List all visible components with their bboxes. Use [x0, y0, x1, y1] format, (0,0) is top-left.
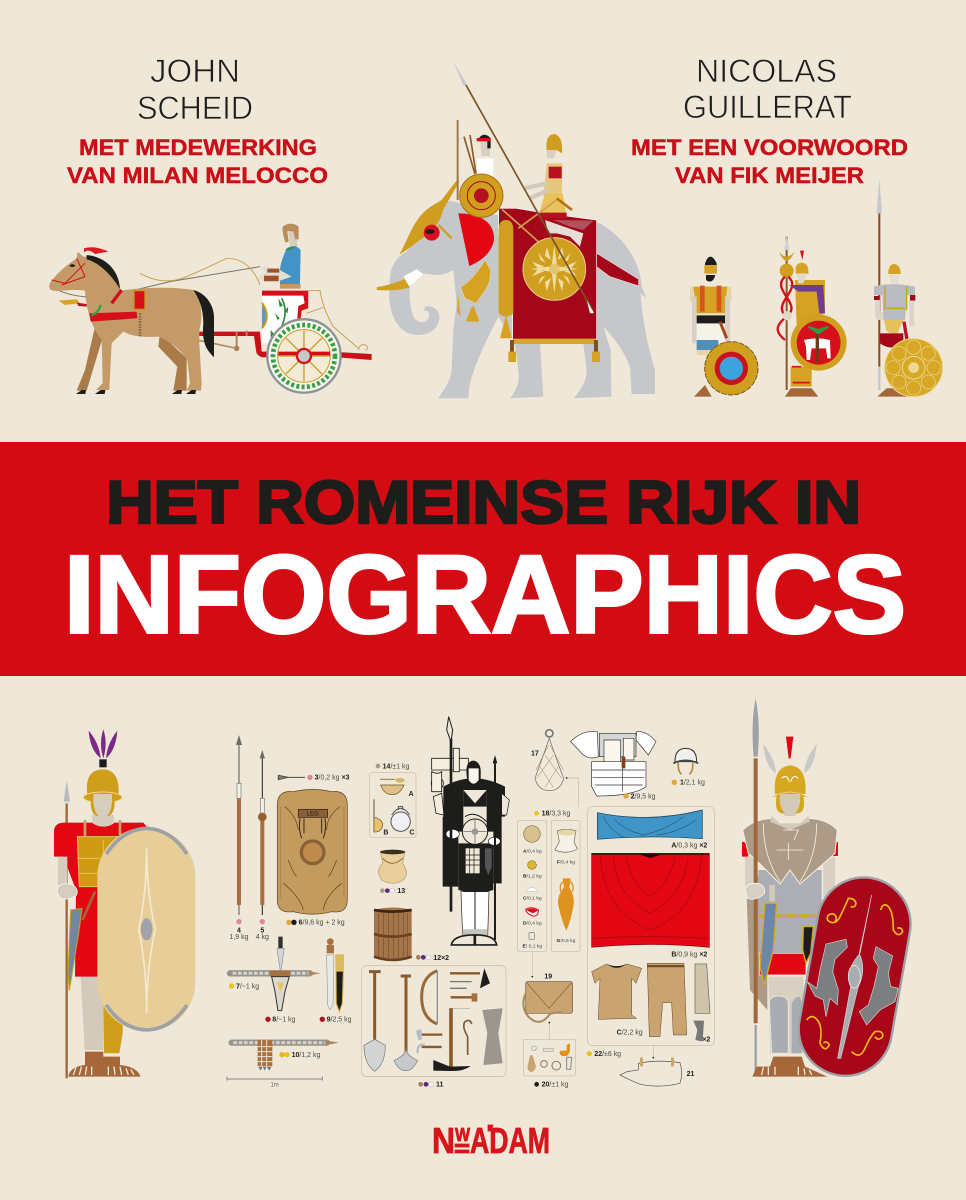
- illustration: three ancient soldiers: [690, 178, 943, 397]
- soldier three: Roman: [874, 178, 943, 397]
- item 8: dagger: [265, 937, 296, 1024]
- lower left legionary and weapons: [54, 729, 352, 1089]
- sun shield on elephant: [523, 238, 586, 300]
- neck: [770, 816, 810, 830]
- soldier feet: [451, 935, 497, 945]
- fur cape: [743, 818, 837, 884]
- item 2: lorica armour: 2/9,5 kg: [631, 793, 656, 800]
- right items: armour, helmet, clothing: [571, 731, 714, 1086]
- item 22 label: 22/±6 kg: [594, 1051, 621, 1058]
- legs: [81, 977, 103, 1050]
- chariot pole and floor: [195, 332, 372, 360]
- elephant headpiece: [399, 179, 459, 254]
- soldier legs: [461, 892, 489, 937]
- cloth A: blue: [597, 810, 707, 850]
- chariot wheel: [267, 319, 341, 393]
- illustration: war elephant: [377, 62, 655, 398]
- soldier one: Punic: [690, 257, 758, 397]
- item 18: food panels: G/0,5 kg: [557, 938, 576, 944]
- legionary oval shield: [97, 827, 195, 1031]
- item 11: tools panel: [362, 966, 506, 1089]
- item 18: food panels: A/0,4 kg: [523, 848, 542, 854]
- rider: general: [502, 134, 583, 247]
- yellow scrolls: [807, 898, 903, 1055]
- publisher logo: Nw'Adam: [432, 1120, 550, 1161]
- author left: John Scheid: VAN MILAN MELOCCO: [67, 163, 328, 188]
- item 7: belt: [229, 972, 321, 990]
- publisher logo: Nw'Adam: W: [455, 1125, 470, 1145]
- small tools: [422, 973, 480, 1047]
- arm and hand: [58, 857, 67, 885]
- publisher logo: Nw'Adam: ADAM: [470, 1120, 550, 1161]
- horse mane: [87, 255, 120, 289]
- item 4: pilum: 4: [237, 927, 241, 934]
- long spear: [465, 83, 593, 312]
- wolf shield: [791, 870, 918, 1083]
- item 2: lorica armour: [571, 731, 656, 800]
- horse harness: [84, 247, 108, 254]
- item 6: scutum: [277, 789, 347, 927]
- item 12: basket: [374, 907, 449, 962]
- author right: Nicolas Guillerat: GUILLERAT: [683, 89, 852, 125]
- horse far legs: [77, 327, 187, 391]
- red tunic: [54, 823, 147, 977]
- cloth A: blue: A/0,3 kg ×2: [671, 843, 707, 850]
- soldier skirt: [458, 843, 493, 892]
- lower right legionary: [742, 698, 918, 1083]
- spear: [753, 698, 759, 1075]
- item 14: mess kit panel: [369, 763, 416, 837]
- author left: John Scheid: SCHEID: [137, 90, 253, 126]
- soldier backpack: [431, 748, 468, 815]
- item 21: sack: 21: [687, 1071, 695, 1078]
- spear of legionary: [64, 780, 70, 1078]
- black and white soldier: [431, 717, 509, 945]
- center: equipped soldier, containers and tools: [362, 717, 580, 1089]
- publisher logo: Nw'Adam: N: [432, 1120, 455, 1161]
- rope: [482, 1008, 503, 1065]
- sandals: [68, 1052, 141, 1077]
- item 5: pilum with ball: [256, 750, 269, 941]
- pickaxe: [401, 976, 411, 1053]
- elephant blanket: [499, 208, 597, 339]
- elephant tusk: [377, 277, 410, 290]
- soldier spears: [447, 738, 455, 912]
- item 9: gladius: 9/2,5 kg: [327, 1017, 352, 1024]
- elephant neck trapper: [458, 213, 494, 266]
- hand: [745, 883, 765, 899]
- soldier hands: [446, 829, 459, 839]
- soldier two: with caduceus: [778, 235, 847, 397]
- item 18: food panels: 18/3,3 kg: [542, 811, 571, 818]
- item 17: net: [531, 730, 578, 807]
- title line two: INFOGRAPHICS: [64, 534, 906, 656]
- cloak back and legs: [746, 877, 803, 1053]
- item 8: dagger: 8/~1 kg: [272, 1017, 296, 1024]
- item 19: satchel: [523, 974, 573, 1039]
- item 11: tools panel: 11: [436, 1082, 443, 1089]
- wolves: [807, 939, 847, 1017]
- sword and belt: [759, 885, 817, 985]
- cloth B: red cloak: B/0,9 kg ×2: [671, 952, 707, 959]
- item 7: belt: 7/~1 kg: [236, 983, 259, 990]
- item 13: pot: [379, 850, 407, 895]
- item 12: basket: 12×2: [433, 955, 449, 962]
- helmet crest: [763, 737, 817, 773]
- clothing panel: [588, 807, 714, 1046]
- item 18: food panels: F/0,4 kg: [557, 859, 575, 865]
- title line one: HET ROMEINSE RIJK IN: [106, 469, 861, 536]
- horse tail: [193, 290, 214, 357]
- arms: [745, 857, 835, 897]
- item 6: scutum: 6/9,6 kg + 2 kg: [299, 920, 345, 927]
- author right: Nicolas Guillerat: NICOLAS: [696, 53, 837, 89]
- shield spine: [838, 895, 872, 1058]
- author right: Nicolas Guillerat: MET EEN VOORWOORD: [631, 135, 908, 160]
- item 13: pot: 13: [397, 888, 405, 895]
- item 6: scutum: LEG: [307, 811, 319, 817]
- red title band: [0, 442, 966, 676]
- author left: John Scheid: MET MEDEWERKING: [79, 135, 317, 160]
- item 18: food panels: B/1,2 kg: [523, 874, 542, 880]
- item 20: small items panel: [523, 1039, 575, 1089]
- soldier arms and torso: [443, 778, 505, 887]
- item 14: mess kit panel: C: [409, 830, 414, 837]
- item 9: gladius: [320, 938, 352, 1024]
- item 21: sack: [620, 1046, 695, 1086]
- illustration: horse and chariot: [49, 224, 372, 394]
- scale bar: 1m: [270, 1083, 279, 1089]
- item 18: food panels: E/ 0,1 kg: [522, 943, 542, 949]
- item 19: satchel: 19: [544, 974, 552, 981]
- soldier head: [466, 761, 481, 786]
- item 14: mess kit panel: B: [383, 830, 388, 837]
- horse body: [49, 252, 202, 391]
- item 17: net: 17: [531, 750, 539, 757]
- elephant body: [389, 201, 655, 398]
- author left: John Scheid: [67, 53, 328, 188]
- clothing C: tunic, trousers, roll and sock: [592, 963, 710, 1043]
- item 5: pilum with ball: 5: [260, 927, 264, 934]
- rider: guard with shield: [458, 120, 503, 217]
- soldier shield on chest: [462, 819, 488, 844]
- item 3: arrow: 3/0,2 kg ×3: [315, 775, 350, 782]
- shovel: [369, 972, 381, 1040]
- clothing C: tunic, trousers, roll and sock: ×2: [702, 1036, 710, 1043]
- item 4: pilum: [229, 735, 249, 941]
- helmet: [83, 769, 122, 817]
- cloth B: red cloak: [592, 853, 709, 959]
- item 1: helmet: 1/2,1 kg: [680, 780, 705, 787]
- chain mail: [758, 870, 822, 957]
- item 10: belt with apron: 10/1,2 kg: [292, 1052, 321, 1059]
- driver: [280, 246, 301, 284]
- item 3: arrow: [278, 775, 350, 782]
- neck and face: [92, 815, 114, 827]
- purple feathers: [89, 729, 117, 767]
- clothing C: tunic, trousers, roll and sock: C/2,2 kg: [617, 1029, 643, 1036]
- item 18: food panels: [518, 811, 580, 975]
- author right: Nicolas Guillerat: VAN FIK MEIJER: [675, 163, 864, 188]
- elephant gold strap: [499, 220, 513, 317]
- item 10: belt with apron: [232, 1040, 339, 1071]
- author left: John Scheid: JOHN: [150, 53, 240, 89]
- saw: [422, 971, 437, 1024]
- item 18: food panels: D/0,4 kg: [523, 920, 542, 926]
- item 5: pilum with ball: 4 kg: [256, 934, 269, 941]
- sandals: [752, 1057, 827, 1077]
- item 1: helmet: [672, 748, 705, 787]
- author right: Nicolas Guillerat: [631, 53, 908, 188]
- breastplate: [77, 837, 120, 887]
- red skirt: [759, 953, 806, 975]
- reins and whip: [57, 267, 260, 297]
- scabbard: [68, 908, 82, 991]
- item 14: mess kit panel: 14/±1 kg: [383, 763, 410, 770]
- item 14: mess kit panel: A: [409, 791, 414, 798]
- crowbar and hook: [445, 1008, 456, 1068]
- item 20: small items panel: 20/±1 kg: [542, 1082, 569, 1089]
- item 4: pilum: 1,9 kg: [229, 934, 249, 941]
- chariot body: [262, 291, 309, 343]
- helmet and face: [772, 765, 808, 816]
- item 18: food panels: C/0,1 kg: [523, 896, 542, 902]
- scale bar: [227, 1077, 322, 1089]
